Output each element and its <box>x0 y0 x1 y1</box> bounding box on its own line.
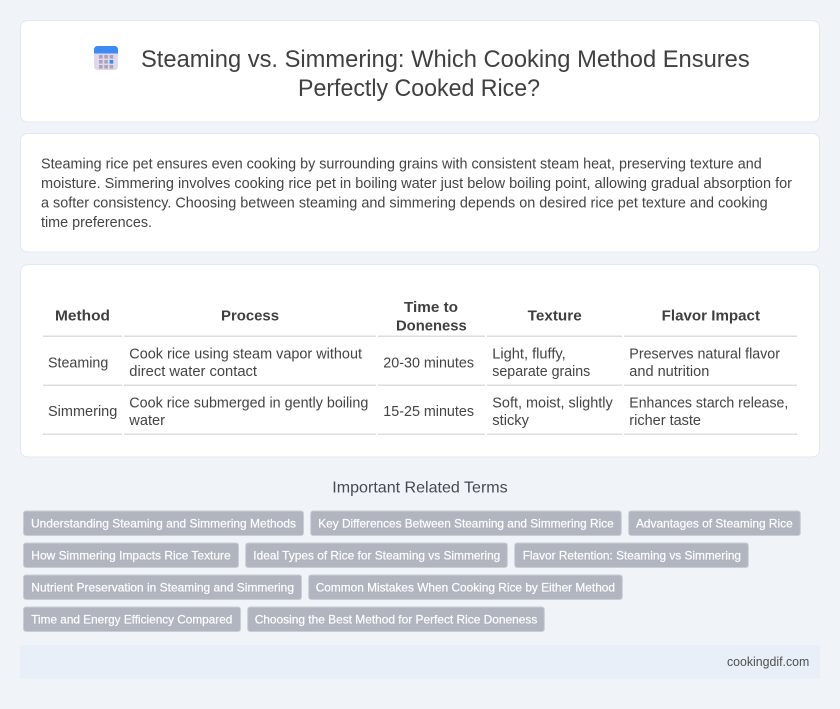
footer <box>20 645 820 679</box>
table header row: Doneness <box>396 319 467 335</box>
tag <box>629 511 800 536</box>
table row: steaming: direct water contact <box>129 364 257 380</box>
table header row <box>43 300 797 337</box>
tag: Common Mistakes When Cooking Rice by Either Method <box>316 580 615 594</box>
tag <box>24 543 238 568</box>
table row: simmering: sticky <box>492 413 530 429</box>
table row: simmering: 15-25 minutes <box>383 404 474 420</box>
table row: steaming: Light, fluffy, <box>492 346 566 362</box>
tag <box>248 607 544 632</box>
table header row: Time to <box>404 300 458 316</box>
table row: simmering: water <box>128 413 165 429</box>
panel: comparison table <box>20 264 820 457</box>
tag: Advantages of Steaming Rice <box>636 516 793 530</box>
text block: description paragraph: Steaming rice pet ensures even cooking by surrounding grains with consistent steam heat, preserving texture and <box>41 156 762 172</box>
text block: description paragraph: time preferences. <box>41 215 152 231</box>
panel: description <box>20 134 820 252</box>
tag <box>515 543 748 568</box>
tag <box>24 575 302 600</box>
text block: description paragraph: a softer consistency. Choosing between steaming and simmering depends on desired rice pet texture and cooking <box>41 196 768 212</box>
title <box>141 46 750 102</box>
heading: related terms: Important Related Terms <box>332 480 508 497</box>
tag: Ideal Types of Rice for Steaming vs Simmering <box>253 548 500 562</box>
panel: header <box>20 20 820 122</box>
tag <box>246 543 507 568</box>
tag: Key Differences Between Steaming and Simmering Rice <box>318 516 614 530</box>
text block: description paragraph: moisture. Simmering involves cooking rice pet in boiling water just below boiling point, allowing gradual absorption for <box>41 176 792 192</box>
table row: steaming: 20-30 minutes <box>383 355 474 371</box>
title: Steaming vs. Simmering: Which Cooking Method Ensures <box>141 46 750 73</box>
table row: simmering: Cook rice submerged in gently boiling <box>129 395 368 411</box>
table row: simmering: Simmering <box>48 404 117 420</box>
table row: simmering: Soft, moist, slightly <box>492 395 613 411</box>
table header row: Process <box>221 309 279 325</box>
tag <box>309 575 622 600</box>
table header row: Texture <box>528 309 582 325</box>
table row: steaming: Preserves natural flavor <box>629 346 780 362</box>
table row: steaming: and nutrition <box>629 364 709 380</box>
text block: description paragraph <box>41 156 792 231</box>
tag: Nutrient Preservation in Steaming and Simmering <box>31 580 294 594</box>
tag: Time and Energy Efficiency Compared <box>31 612 232 626</box>
footer: cookingdif.com <box>727 654 809 669</box>
tag: How Simmering Impacts Rice Texture <box>31 548 231 562</box>
table row: steaming: separate grains <box>492 364 590 380</box>
tag: Understanding Steaming and Simmering Methods <box>31 516 296 530</box>
panel: related term tags <box>24 511 800 632</box>
tag: Choosing the Best Method for Perfect Rice Doneness <box>255 612 537 626</box>
table row: steaming: Cook rice using steam vapor without <box>129 346 362 362</box>
table row: steaming: Steaming <box>48 355 108 371</box>
table row: simmering <box>43 395 797 435</box>
tag: Flavor Retention: Steaming vs Simmering <box>523 548 741 562</box>
icon: calendar <box>94 46 118 70</box>
table row: simmering: richer taste <box>629 413 701 429</box>
table header row: Method <box>55 309 110 325</box>
title: Perfectly Cooked Rice? <box>298 75 540 102</box>
tag <box>24 607 240 632</box>
tag <box>311 511 621 536</box>
table row: simmering: Enhances starch release, <box>629 395 788 411</box>
table row: steaming <box>43 346 797 386</box>
tag <box>24 511 304 536</box>
table header row: Flavor Impact <box>662 309 760 325</box>
